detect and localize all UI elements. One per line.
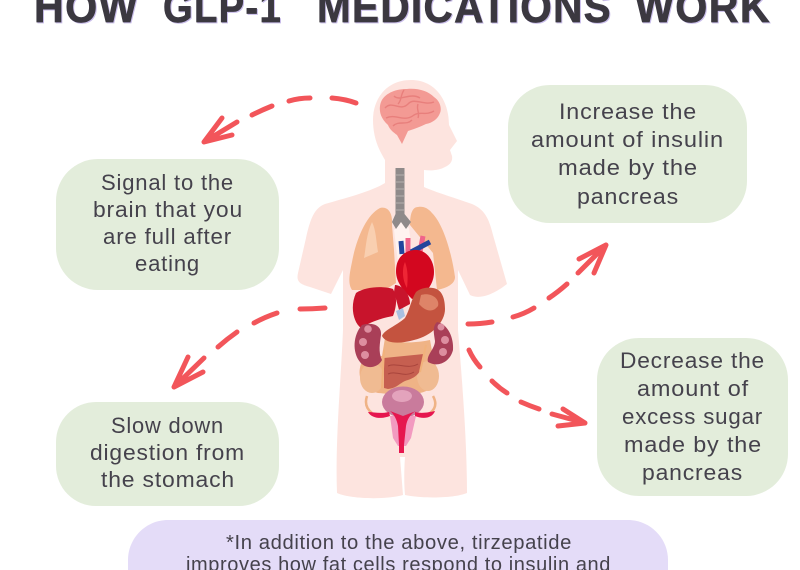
icon: lungs bbox=[349, 207, 455, 290]
icon: kidneys bbox=[355, 322, 453, 367]
title bbox=[34, 0, 771, 32]
panel: signal to the brain: Signal to the bbox=[101, 170, 234, 195]
panel: slow digestion: the stomach bbox=[101, 467, 235, 492]
panel: decrease sugar: amount of bbox=[637, 376, 749, 401]
arrow: to excess sugar text bbox=[469, 350, 585, 426]
panel: slow digestion bbox=[56, 402, 279, 506]
panel: decrease sugar: Decrease the bbox=[620, 348, 765, 373]
panel: decrease sugar: excess sugar bbox=[622, 404, 763, 429]
panel: slow digestion: Slow down bbox=[111, 413, 224, 438]
panel: increase insulin bbox=[508, 85, 747, 223]
icon: heart bbox=[396, 236, 434, 299]
icon: intestines bbox=[360, 338, 439, 395]
panel: increase insulin: made by the bbox=[558, 155, 698, 180]
panel: tirzepatide note: *In addition to the above, tirzepatide bbox=[226, 532, 572, 554]
arrow: to insulin text bbox=[468, 245, 606, 324]
icon: bladder and uterus bbox=[366, 386, 435, 453]
panel: signal to the brain bbox=[56, 159, 279, 290]
panel: tirzepatide note bbox=[128, 520, 668, 570]
icon: brain bbox=[380, 89, 441, 144]
arrow: to stomach text bbox=[174, 308, 325, 387]
panel: decrease sugar: pancreas bbox=[642, 460, 743, 485]
panel: signal to the brain: eating bbox=[135, 251, 200, 276]
panel: decrease sugar bbox=[597, 338, 788, 496]
icon: trachea bbox=[392, 168, 411, 229]
panel: increase insulin: Increase the bbox=[559, 99, 697, 124]
panel: increase insulin: pancreas bbox=[577, 184, 679, 209]
panel: slow digestion: digestion from bbox=[90, 440, 245, 465]
panel: decrease sugar: made by the bbox=[624, 432, 762, 457]
panel: signal to the brain: brain that you bbox=[93, 197, 243, 222]
panel: increase insulin: amount of insulin bbox=[531, 127, 724, 152]
icon: liver bbox=[353, 285, 410, 328]
arrow: to brain text bbox=[204, 98, 356, 142]
panel: signal to the brain: are full after bbox=[103, 224, 232, 249]
body silhouette bbox=[298, 80, 507, 498]
icon: stomach bbox=[382, 288, 445, 343]
